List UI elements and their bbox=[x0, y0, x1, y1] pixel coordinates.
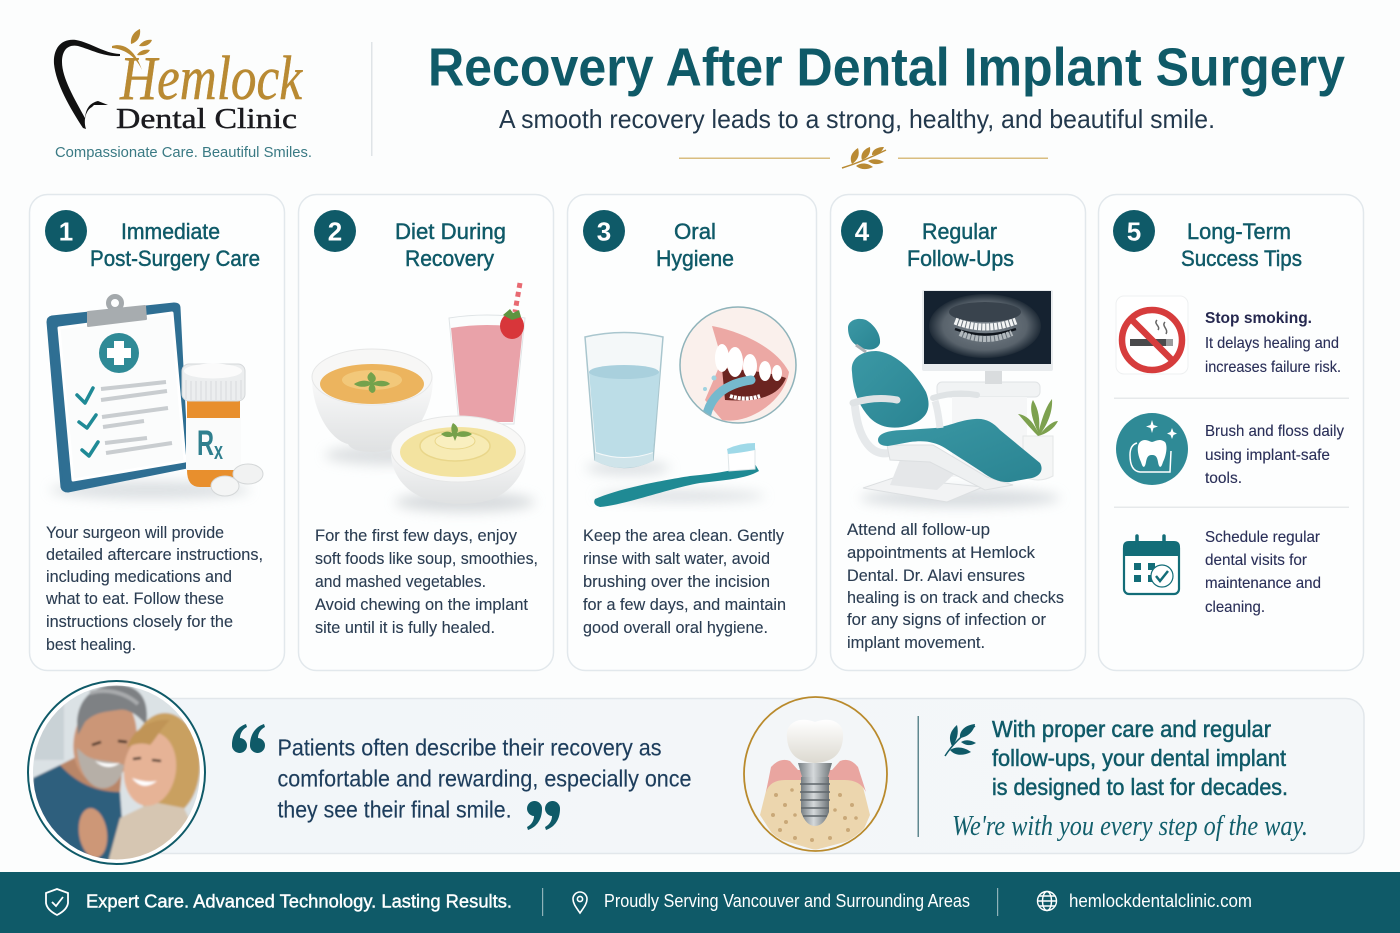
body text: brushing over the incision bbox=[583, 573, 770, 591]
heading: Diet During bbox=[395, 219, 506, 244]
tip: brush and floss bbox=[1205, 423, 1344, 487]
ornament: gold divider with leaves bbox=[679, 147, 1048, 169]
heading: Oral bbox=[674, 219, 716, 244]
step number 5 bbox=[1113, 210, 1155, 252]
tagline: Compassionate Care. Beautiful Smiles. bbox=[55, 145, 312, 161]
panel 2: Diet During Recovery bbox=[298, 194, 554, 670]
script tagline: We're with you every step of the way. bbox=[952, 810, 1308, 842]
closing statement: With proper care and regular bbox=[992, 716, 1271, 742]
body text: appointments at Hemlock bbox=[847, 544, 1036, 562]
step number 3 bbox=[583, 210, 625, 252]
tip: schedule visits: dental visits for bbox=[1205, 552, 1308, 569]
Rx label: R bbox=[197, 424, 222, 463]
heading: Hygiene bbox=[656, 246, 734, 271]
closing statement: follow-ups, your dental implant bbox=[992, 745, 1287, 771]
heading bbox=[395, 219, 506, 271]
heading: Recovery bbox=[405, 246, 494, 271]
footer bar bbox=[0, 872, 1400, 933]
body text: rinse with salt water, avoid bbox=[583, 550, 770, 568]
illustration: toothbrush bbox=[594, 443, 765, 507]
tip: brush and floss: tools. bbox=[1205, 470, 1242, 487]
icon: tooth outline bbox=[54, 40, 120, 129]
icon: no smoking bbox=[1116, 296, 1188, 374]
body text bbox=[847, 521, 1064, 652]
step number 2 bbox=[314, 210, 356, 252]
illustration: plant bbox=[1018, 399, 1058, 480]
step number 4: 4 bbox=[855, 216, 870, 246]
tip: schedule visits: Schedule regular bbox=[1205, 529, 1321, 546]
body text: including medications and bbox=[46, 568, 232, 586]
body text: Avoid chewing on the implant bbox=[315, 596, 528, 614]
heading: Post-Surgery Care bbox=[90, 246, 260, 271]
tip: brush and floss: Brush and floss daily bbox=[1205, 423, 1344, 440]
heading bbox=[656, 219, 734, 271]
photo: smiling couple bbox=[28, 681, 205, 864]
icon: opening quotation mark bbox=[232, 724, 265, 753]
body text: healing is on track and checks bbox=[847, 589, 1064, 607]
illustration: clipboard and pill bottle bbox=[48, 296, 263, 499]
wordmark Hemlock: Hemlock bbox=[119, 45, 303, 113]
logo: Hemlock Dental Clinic bbox=[54, 29, 312, 161]
body text: and mashed vegetables. bbox=[315, 573, 486, 591]
tip: schedule visits bbox=[1205, 529, 1321, 616]
closing statement bbox=[992, 716, 1288, 800]
illustration: dental implant circle bbox=[744, 697, 887, 851]
heading bbox=[1181, 219, 1302, 271]
testimonial band bbox=[28, 681, 1364, 864]
footer tagline: Expert Care. Advanced Technology. Lasting Results. bbox=[86, 892, 512, 912]
body text: instructions closely for the bbox=[46, 613, 233, 631]
panel 1: Immediate Post-Surgery Care bbox=[30, 194, 284, 670]
Rx label: x bbox=[214, 438, 223, 465]
step number 2: 2 bbox=[328, 216, 342, 246]
icon: golden arc and leaves bbox=[112, 29, 152, 70]
icon: map pin bbox=[573, 892, 587, 913]
icon: sparkling tooth bbox=[1116, 413, 1188, 485]
icon: shield check bbox=[46, 889, 68, 915]
tip: stop smoking bbox=[1205, 310, 1341, 376]
footer location: Proudly Serving Vancouver and Surrounding Areas bbox=[604, 891, 970, 911]
panel 3: Oral Hygiene bbox=[568, 194, 816, 670]
tip: schedule visits: cleaning. bbox=[1205, 599, 1265, 616]
step number 5: 5 bbox=[1127, 216, 1141, 246]
quote text: Patients often describe their recovery as bbox=[278, 734, 662, 760]
quote text bbox=[278, 734, 692, 822]
body text: site until it is fully healed. bbox=[315, 619, 495, 637]
heading bbox=[90, 219, 260, 271]
body text: for a few days, and maintain bbox=[583, 596, 786, 614]
body text: good overall oral hygiene. bbox=[583, 619, 768, 637]
body text: implant movement. bbox=[847, 634, 985, 652]
body text bbox=[583, 527, 786, 637]
icon: closing quotation mark bbox=[527, 801, 560, 830]
heading: Success Tips bbox=[1181, 246, 1302, 271]
body text: Dental. Dr. Alavi ensures bbox=[847, 567, 1025, 585]
heading: Long-Term bbox=[1187, 219, 1291, 244]
subtitle: A smooth recovery leads to a strong, healthy, and beautiful smile. bbox=[499, 104, 1215, 134]
heading: Immediate bbox=[121, 219, 220, 244]
body text: what to eat. Follow these bbox=[45, 590, 224, 608]
icon: teal leaf sprig bbox=[945, 724, 976, 756]
panel 4: Regular Follow-Ups bbox=[830, 194, 1086, 670]
heading: Regular bbox=[922, 219, 997, 244]
step number 4 bbox=[841, 210, 883, 252]
footer website: hemlockdentalclinic.com bbox=[1069, 891, 1252, 911]
body text: best healing. bbox=[46, 636, 136, 654]
tip: brush and floss: using implant-safe bbox=[1205, 447, 1330, 464]
illustration: mouth rinse circle bbox=[680, 307, 796, 423]
body text: for any signs of infection or bbox=[847, 611, 1047, 629]
heading bbox=[907, 219, 1014, 271]
step number 1 bbox=[45, 210, 87, 252]
body text: Your surgeon will provide bbox=[46, 524, 224, 542]
tip: stop smoking: Stop smoking. bbox=[1205, 310, 1312, 327]
wordmark Dental Clinic: Dental Clinic bbox=[116, 104, 297, 135]
step number 1: 1 bbox=[59, 216, 73, 246]
illustration: soup, smoothie and mashed vegetables bbox=[312, 283, 535, 512]
step number 3: 3 bbox=[597, 216, 611, 246]
body text: Keep the area clean. Gently bbox=[583, 527, 785, 545]
quote text: comfortable and rewarding, especially once bbox=[278, 766, 692, 792]
body text bbox=[45, 524, 263, 654]
illustration: dental chair bbox=[848, 319, 1060, 507]
closing statement: is designed to last for decades. bbox=[992, 774, 1288, 800]
panel 5: Long-Term Success Tips bbox=[1098, 194, 1364, 670]
title: Recovery After Dental Implant Surgery bbox=[428, 38, 1345, 98]
body text: detailed aftercare instructions, bbox=[46, 546, 263, 564]
tip: schedule visits: maintenance and bbox=[1205, 575, 1321, 592]
body text: For the first few days, enjoy bbox=[315, 527, 518, 545]
tip: stop smoking: It delays healing and bbox=[1205, 335, 1339, 352]
icon: globe bbox=[1038, 892, 1056, 910]
body text: soft foods like soup, smoothies, bbox=[315, 550, 538, 568]
quote text: they see their final smile. bbox=[278, 796, 512, 822]
body text bbox=[315, 527, 538, 637]
illustration: x-ray monitor bbox=[922, 290, 1053, 477]
heading: Follow-Ups bbox=[907, 246, 1014, 271]
icon: calendar check bbox=[1123, 536, 1180, 594]
body text: Attend all follow-up bbox=[847, 521, 990, 539]
illustration: water glass bbox=[585, 332, 670, 475]
tip: stop smoking: increases failure risk. bbox=[1205, 359, 1341, 376]
